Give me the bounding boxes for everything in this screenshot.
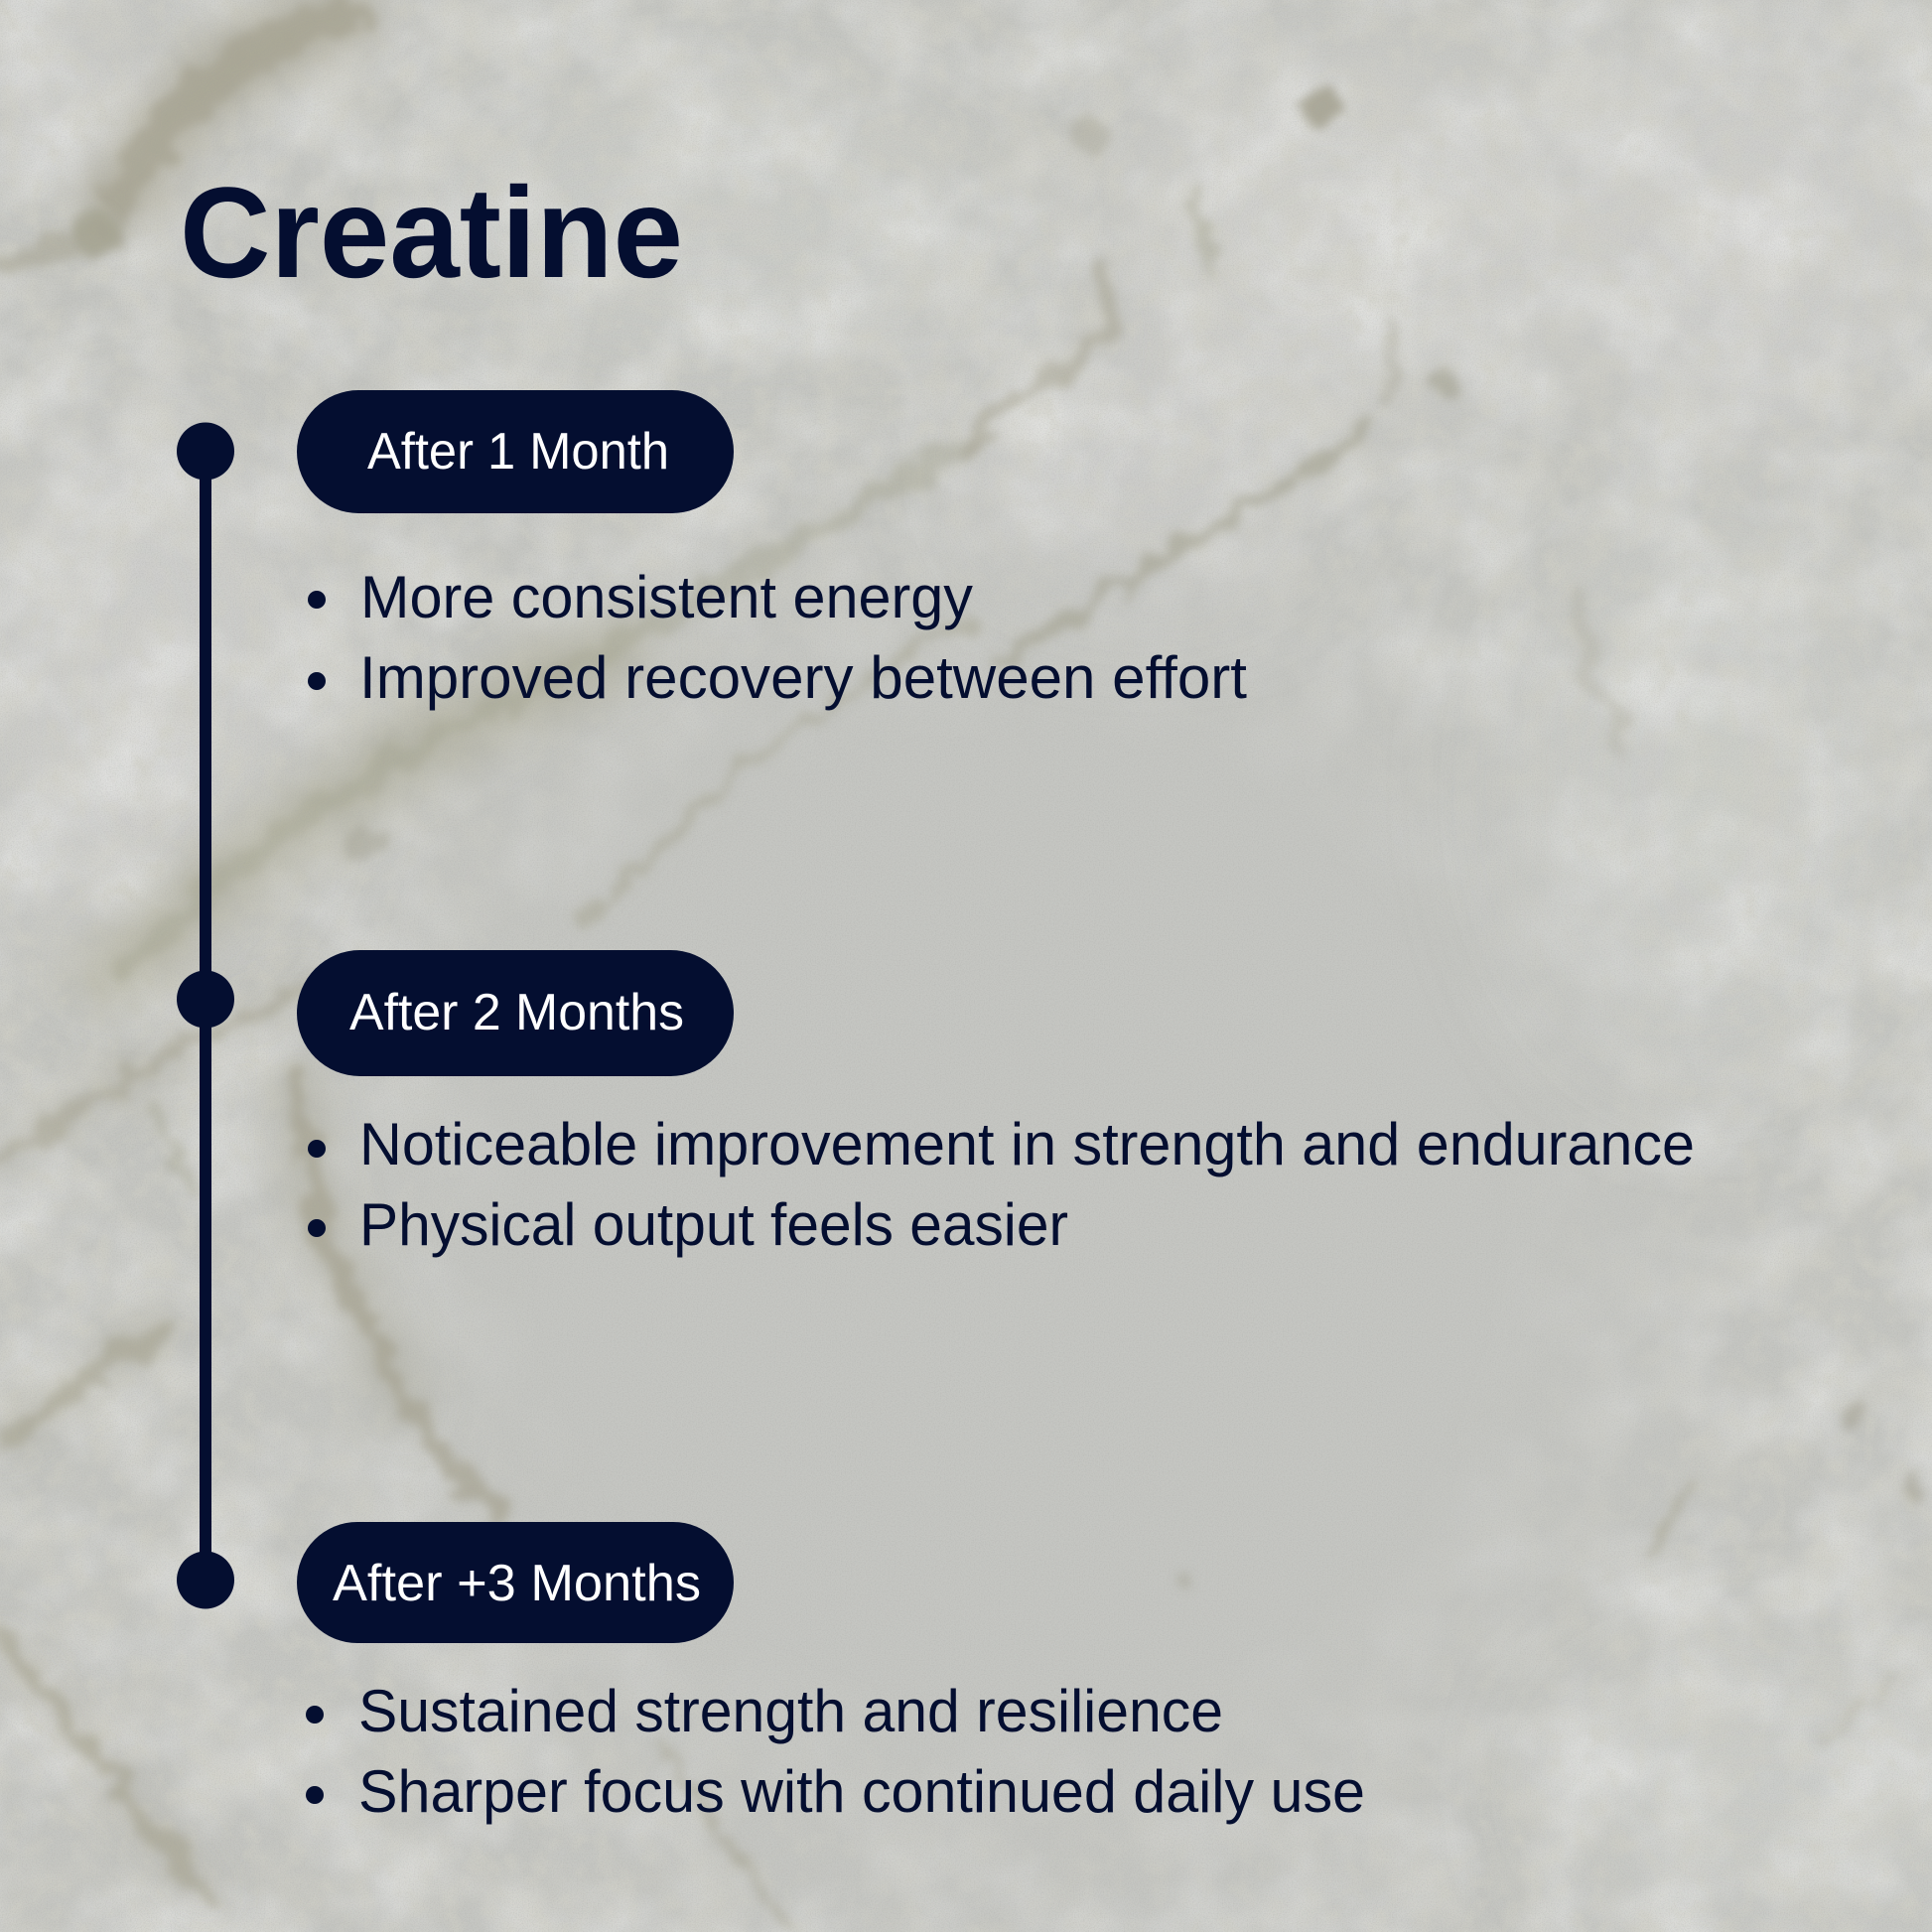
bullet list: after 3+ months	[306, 1678, 1365, 1825]
pill: After +3 Months	[297, 1522, 734, 1643]
panel: after 1 month	[297, 390, 1247, 711]
panel: after 3+ months	[297, 1522, 1365, 1825]
panel: after 2 months	[297, 950, 1695, 1258]
bullet list: after 2 months: Physical output feels easier	[359, 1191, 1068, 1258]
pill: After 1 Month	[297, 390, 734, 513]
timeline: vertical line and three nodes	[177, 423, 234, 1608]
pill: After 1 Month: After 1 Month	[367, 423, 669, 481]
bullet list: after 2 months: Noticeable improvement in strength and endurance	[359, 1111, 1695, 1177]
bullet list: after 3+ months: Sharper focus with continued daily use	[358, 1758, 1365, 1825]
bullet list: after 1 month: More consistent energy	[360, 564, 973, 630]
pill: After 2 Months: After 2 Months	[349, 984, 684, 1041]
pill: After 2 Months	[297, 950, 734, 1076]
bullet list: after 3+ months: Sustained strength and resilience	[358, 1678, 1223, 1744]
bullet list: after 1 month	[308, 564, 1247, 711]
bullet list: after 2 months	[308, 1111, 1695, 1258]
bullet list: after 1 month: Improved recovery between effort	[359, 644, 1247, 711]
pill: After +3 Months: After +3 Months	[333, 1555, 701, 1612]
title: Creatine	[180, 160, 683, 305]
